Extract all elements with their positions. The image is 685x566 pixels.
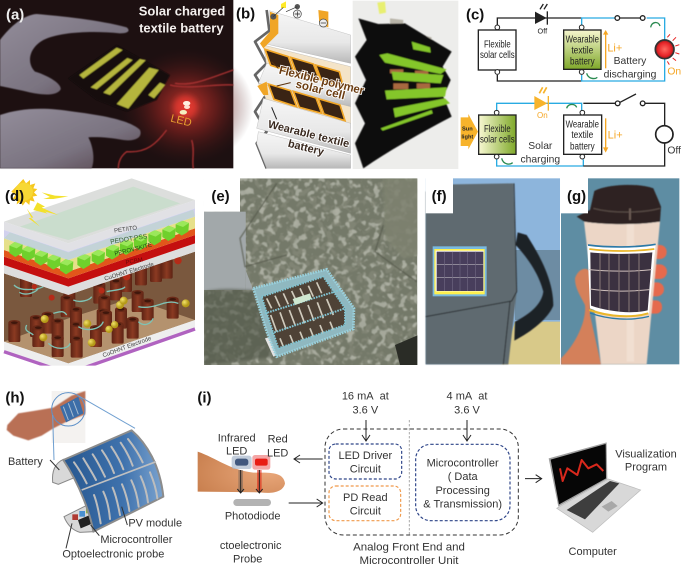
battery box: Wearable bbox=[566, 119, 599, 130]
battery inner bbox=[52, 459, 81, 484]
copper cells bbox=[390, 69, 430, 89]
terminals bbox=[270, 1, 327, 27]
bottom circuit: charging bbox=[521, 154, 560, 165]
arm sleeve bbox=[204, 289, 277, 365]
panel: (i) analog front end and MCU diagram bbox=[325, 391, 677, 566]
battery box bbox=[564, 30, 601, 69]
top circuit: discharging bbox=[604, 69, 657, 80]
text: Red LED: Red bbox=[268, 433, 288, 445]
sunlight arrow: light bbox=[461, 135, 473, 141]
finger bbox=[198, 452, 285, 493]
panel: (i) left probe bbox=[197, 389, 323, 566]
infrared LED bbox=[232, 456, 252, 493]
layer labels bbox=[102, 225, 155, 359]
label box: (f): (f) bbox=[432, 188, 447, 205]
label: (i): (i) bbox=[197, 389, 211, 406]
layer labels: PET/ITO bbox=[114, 225, 138, 235]
arrow: 4 mA bbox=[463, 420, 471, 441]
label: (c): (c) bbox=[466, 6, 484, 23]
heading: Solar charged textile battery: Solar charged bbox=[139, 4, 225, 19]
orange layer bbox=[4, 228, 195, 278]
layer labels: CuOHNT Electrode bbox=[104, 262, 155, 283]
lamp off bbox=[656, 126, 673, 143]
label: (h): (h) bbox=[5, 389, 24, 406]
roll segments bbox=[257, 11, 351, 168]
microcontroller box bbox=[416, 444, 510, 521]
Li+ arrow: Li+ bbox=[607, 43, 622, 55]
text: 4 mA at 3.6 V: 3.6 V bbox=[454, 404, 480, 416]
panel: (b) folded solar textile schematic bbox=[236, 1, 351, 168]
layer labels: PEDOT:PSS bbox=[110, 233, 148, 246]
diode on bbox=[534, 87, 548, 111]
label box: (e): (e) bbox=[211, 188, 230, 205]
text: Infrared LED: LED bbox=[226, 446, 247, 458]
lid bbox=[577, 185, 661, 224]
leader lines bbox=[50, 460, 127, 548]
LED driver box: LED Driver bbox=[338, 450, 393, 462]
yellow backing bbox=[4, 217, 195, 272]
dashed center divider bbox=[408, 420, 411, 535]
text: Visualization Program: Program bbox=[625, 462, 667, 474]
solar box: solar cells bbox=[480, 50, 515, 61]
glass layers bbox=[4, 178, 195, 260]
label: (a): (a) bbox=[6, 6, 24, 23]
PD read box: Circuit bbox=[350, 506, 381, 518]
wires bbox=[497, 18, 582, 81]
heading: Solar charged textile battery: textile battery bbox=[139, 21, 224, 36]
cup body bbox=[584, 222, 660, 364]
tabs and led bbox=[377, 2, 386, 14]
PD read box: PD Read bbox=[343, 492, 388, 504]
text: 16 mA at 3.6 V: 16 mA at bbox=[342, 391, 389, 403]
Li+ arrow bbox=[603, 118, 623, 153]
panel: (a) solar charged textile battery photo bbox=[0, 0, 253, 168]
bag body bbox=[426, 183, 517, 364]
battery box bbox=[564, 115, 602, 154]
tab with chips bbox=[64, 503, 94, 532]
text: Off: Off bbox=[538, 26, 548, 35]
solar box: Flexible bbox=[484, 124, 511, 135]
text: Visualization Program: Visualization bbox=[615, 448, 677, 460]
orange tabs bbox=[257, 10, 328, 95]
lower finger bbox=[0, 109, 141, 168]
LED driver box: Circuit bbox=[350, 464, 381, 476]
panel: (e) camouflage jacket photo bbox=[204, 177, 420, 365]
text: Microcontroller: Microcontroller bbox=[100, 534, 173, 546]
yellow solar strips bbox=[79, 48, 165, 109]
nanotubes bbox=[8, 257, 179, 358]
top circuit bbox=[478, 4, 681, 81]
battery box: battery bbox=[570, 57, 595, 68]
zoom lines bbox=[53, 396, 135, 460]
jacket flap bbox=[383, 178, 420, 258]
red LED bbox=[252, 455, 270, 493]
panel: (g) cup photo bbox=[561, 177, 679, 364]
Li+ arrow: Li+ bbox=[608, 129, 623, 141]
teal wires bbox=[14, 285, 178, 348]
wrist photo bbox=[7, 391, 85, 443]
solar box: solar cells bbox=[480, 135, 515, 146]
label: LED: LED bbox=[169, 113, 193, 129]
photo: (b) black textile with green strips bbox=[353, 1, 458, 169]
label: (b): (b) bbox=[236, 5, 255, 22]
label box: (g): (g) bbox=[567, 188, 586, 205]
battery box: textile bbox=[571, 130, 594, 141]
Li+ arrow bbox=[603, 30, 622, 68]
photodiode bbox=[233, 499, 271, 506]
label box: (e) bbox=[204, 177, 240, 212]
arrow: 16 mA bbox=[362, 420, 370, 441]
microcontroller box: & Transmission) bbox=[423, 498, 502, 510]
solar cells bbox=[265, 49, 345, 121]
sunlight arrow bbox=[461, 114, 478, 149]
text: Wearable textile battery: battery bbox=[287, 138, 326, 159]
upper finger bbox=[0, 14, 129, 95]
text: Battery: Battery bbox=[8, 456, 43, 468]
label box: (g) bbox=[561, 177, 588, 213]
LED on bbox=[655, 34, 679, 65]
label box: (f) bbox=[426, 177, 453, 213]
yellow particles bbox=[39, 297, 190, 347]
microcontroller box: Microcontroller bbox=[427, 457, 499, 469]
text: On: On bbox=[667, 67, 681, 78]
text: Wearable textile battery: Wearable textile bbox=[267, 119, 350, 150]
text: Optoelectronic Probe: ctoelectronic bbox=[220, 540, 282, 552]
text: Off: Off bbox=[667, 146, 681, 157]
device fabric bbox=[68, 45, 170, 112]
perovskite cubes bbox=[9, 220, 189, 274]
black fabric bbox=[355, 18, 452, 168]
text: Flexible polymer solar cell: Flexible polymer bbox=[278, 64, 366, 97]
text: 4 mA at 3.6 V: 4 mA at bbox=[447, 391, 487, 403]
text: Computer: Computer bbox=[569, 546, 617, 558]
bag strap bbox=[514, 232, 553, 341]
layer labels: PCBM bbox=[125, 257, 143, 266]
textile band bbox=[253, 269, 354, 357]
battery box: textile bbox=[571, 45, 594, 56]
text: Red LED: LED bbox=[267, 447, 288, 459]
text: Infrared LED: Infrared bbox=[218, 432, 256, 444]
arrow to finger LEDs bbox=[294, 455, 323, 463]
sunlight arrow: Sun bbox=[462, 127, 473, 133]
text: Photodiode: Photodiode bbox=[225, 510, 280, 522]
bottom electrode bbox=[4, 320, 195, 366]
microcontroller box: Processing bbox=[435, 485, 490, 497]
solar module on cup bbox=[587, 244, 656, 319]
PCBM layer bbox=[4, 235, 195, 287]
wires bbox=[118, 70, 233, 168]
diode off bbox=[535, 4, 547, 25]
solar module on bag bbox=[433, 246, 487, 296]
panel: (h) wearable pulse oximeter bbox=[5, 389, 182, 561]
text: battery discharging: Battery bbox=[614, 56, 647, 67]
fingers bbox=[647, 245, 667, 314]
text: solar charging: Solar bbox=[528, 141, 553, 152]
flexible module bbox=[52, 430, 163, 532]
pointer arrows bbox=[272, 62, 291, 119]
solar box: Flexible bbox=[484, 39, 511, 50]
purple base edge bbox=[4, 327, 196, 366]
battery box: battery bbox=[570, 141, 595, 152]
icon: laptop bbox=[549, 442, 641, 532]
text: Flexible polymer solar cell: solar cell bbox=[294, 78, 346, 102]
text: On: On bbox=[537, 111, 548, 120]
panel: (d) perovskite stack bbox=[4, 178, 195, 373]
red particles bbox=[32, 257, 182, 301]
LED lights bbox=[173, 95, 197, 119]
text: 16 mA at 3.6 V: 3.6 V bbox=[353, 404, 379, 416]
arrow from photodiode bbox=[289, 499, 323, 507]
panel: (c) circuit diagrams bbox=[461, 4, 681, 166]
layer labels: CuOHNT Electrode bbox=[102, 336, 153, 359]
battery box: Wearable bbox=[566, 34, 599, 45]
jacket flap shadows bbox=[240, 183, 417, 282]
blue sheet bbox=[63, 430, 163, 532]
solar box bbox=[478, 30, 516, 70]
text: PV module: PV module bbox=[128, 517, 182, 529]
bottom circuit bbox=[461, 87, 681, 166]
analog front end outer box bbox=[325, 429, 518, 535]
panel: (f) bag photo bbox=[426, 177, 560, 364]
label: (d): (d) bbox=[5, 188, 24, 205]
arrow to computer bbox=[525, 475, 542, 483]
LED driver box bbox=[329, 444, 402, 479]
PD read box bbox=[329, 486, 401, 521]
layer labels: PEROVSKITE bbox=[114, 243, 153, 258]
text: Analog Front End and Microcontroller Unit: Analog Front End and bbox=[353, 542, 465, 554]
green strips bbox=[379, 42, 450, 131]
microcontroller box: ( Data bbox=[448, 471, 479, 483]
text: Optoelectronic Probe: Probe bbox=[233, 554, 262, 566]
folded side edge bbox=[255, 10, 269, 168]
icon: sun and lightning bolts bbox=[11, 179, 68, 227]
CuOHNT electrode layer bbox=[4, 243, 195, 295]
solar box bbox=[479, 115, 516, 154]
hand bbox=[561, 269, 601, 364]
text: Optoelectronic probe: Optoelectronic probe bbox=[62, 549, 164, 561]
